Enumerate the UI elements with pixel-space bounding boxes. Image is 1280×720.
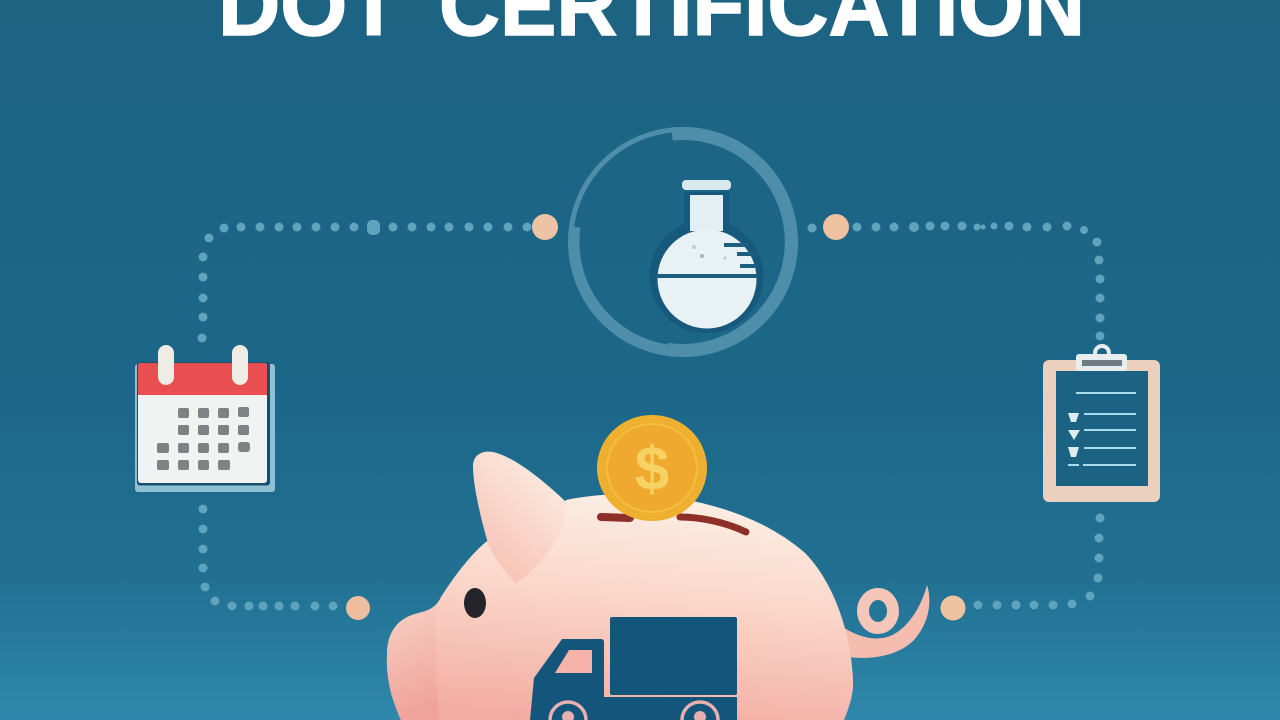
icon: progress ring: [570, 130, 796, 354]
icon: flask: [650, 180, 764, 333]
connector node: bottom left: [346, 596, 370, 620]
pig ear: [473, 452, 566, 583]
dotted connector: bottom right: [974, 514, 1104, 610]
pig snout shading: [387, 608, 440, 720]
gold coin: $: [635, 435, 669, 504]
connector node: top right: [823, 214, 849, 240]
connector node: top left: [532, 214, 558, 240]
pig body: [387, 494, 853, 720]
pig tail: [835, 585, 929, 658]
coin slot: [601, 517, 746, 532]
truck wheels: [550, 702, 718, 720]
dotted connector: top right: [808, 222, 1104, 340]
dotted connector: bottom left: [198, 504, 338, 610]
gold coin: [597, 415, 707, 521]
pig eye: [464, 588, 486, 618]
icon: calendar: [135, 345, 275, 492]
dotted connector: top left: [198, 220, 532, 342]
illustration: piggy bank with truck: [387, 415, 929, 720]
icon: clipboard: [1043, 346, 1160, 502]
truck icon: [530, 617, 737, 720]
connector node: bottom right: [940, 596, 966, 620]
